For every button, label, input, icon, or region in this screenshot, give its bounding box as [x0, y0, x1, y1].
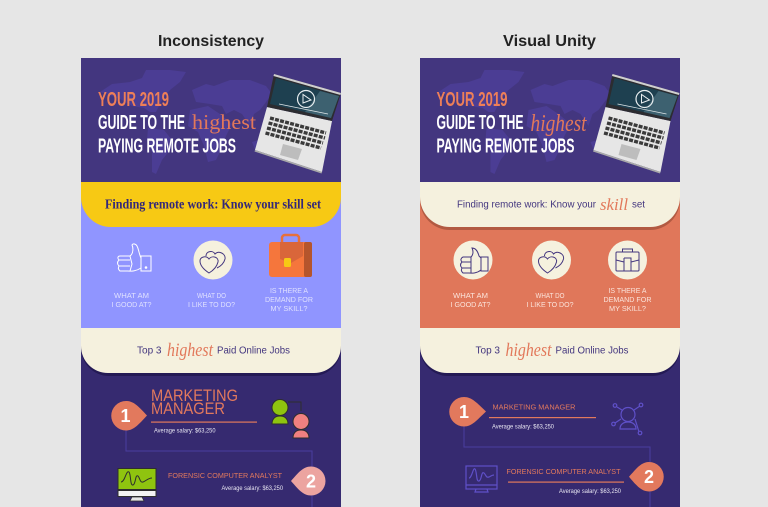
pin: number 1: 1	[459, 402, 469, 422]
header title: YOUR 2019	[436, 89, 508, 111]
job: forensic computer analyst: Average salary: $63,250	[222, 486, 284, 492]
pin: number 1	[449, 397, 486, 426]
job: forensic computer analyst	[168, 471, 284, 492]
cream banner: top 3: highest	[506, 340, 552, 361]
pin: number 2	[291, 466, 326, 496]
job: marketing manager: MARKETING MANAGER	[492, 403, 576, 412]
label: is there a demand: DEMAND FOR	[265, 295, 313, 304]
panel: inconsistency infographic	[81, 58, 341, 507]
label: is there a demand: DEMAND FOR	[604, 295, 652, 304]
job: marketing manager: Average salary: $63,250	[154, 428, 216, 434]
label: what am I good at: I GOOD AT?	[112, 300, 152, 309]
label: what do I like to do: WHAT DO	[536, 291, 565, 300]
heading: Visual Unity: Visual Unity	[503, 33, 596, 50]
cream banner: skill set: Finding remote work: Know your	[457, 198, 596, 210]
cream banner: top 3: Top 3	[137, 346, 162, 356]
header title: highest	[192, 110, 256, 134]
header title: PAYING REMOTE JOBS	[98, 136, 236, 158]
pin: number 1: 1	[120, 406, 131, 426]
world map	[100, 70, 272, 174]
skills section background	[81, 182, 341, 328]
pin: number 1	[111, 401, 147, 430]
cream banner: top 3	[420, 328, 680, 376]
yellow banner	[81, 182, 341, 227]
cream banner: skill set: set	[632, 198, 645, 210]
icon: outline person network	[612, 403, 643, 435]
yellow banner: Finding remote work: Know your skill set	[105, 198, 321, 212]
pin: number 2: 2	[306, 472, 316, 492]
world map	[438, 70, 610, 174]
pin: number 2: 2	[644, 467, 654, 487]
panel: visual unity infographic	[420, 58, 680, 507]
label: is there a demand: MY SKILL?	[270, 304, 308, 313]
job: marketing manager	[151, 387, 257, 434]
icon: hearts in circle	[194, 240, 232, 280]
skills section background	[420, 182, 680, 328]
label: what am I good at: WHAT AM	[453, 291, 488, 300]
label: is there a demand: IS THERE A	[270, 286, 309, 295]
header title	[436, 89, 588, 158]
icon: briefcase in circle	[608, 240, 647, 280]
pin: number 2	[629, 462, 664, 492]
label: what do I like to do: WHAT DO	[197, 291, 226, 300]
job: forensic computer analyst: FORENSIC COMPUTER ANALYST	[506, 467, 621, 476]
header title: GUIDE TO THE	[98, 112, 185, 134]
icon: hearts in circle	[532, 240, 571, 280]
label: what am I good at: I GOOD AT?	[450, 300, 490, 309]
icon: thumbs up	[118, 244, 151, 271]
job: forensic computer analyst	[506, 467, 624, 495]
header title: GUIDE TO THE	[436, 112, 524, 134]
header title: highest	[530, 111, 588, 137]
label: is there a demand: MY SKILL?	[609, 304, 646, 313]
icon: laptop	[593, 74, 680, 174]
icon: green monitor	[118, 468, 156, 501]
header title: YOUR 2019	[98, 89, 169, 111]
cream banner: top 3	[81, 328, 341, 376]
job: forensic computer analyst: Average salary: $63,250	[559, 489, 622, 495]
job: marketing manager: Average salary: $63,250	[492, 424, 555, 430]
header title: PAYING REMOTE JOBS	[436, 136, 574, 158]
cream banner: top 3: highest	[167, 340, 214, 361]
job: marketing manager: MANAGER	[151, 400, 225, 418]
label: is there a demand: IS THERE A	[608, 286, 647, 295]
cream banner: top 3: Paid Online Jobs	[556, 346, 628, 356]
heading: Inconsistency: Inconsistency	[158, 33, 264, 50]
header title	[98, 89, 256, 158]
icon: outline monitor	[466, 466, 497, 492]
icon: thumbs up in circle	[454, 240, 492, 280]
icon: people	[272, 400, 309, 438]
cream banner: top 3: Paid Online Jobs	[217, 346, 290, 356]
job: marketing manager	[489, 403, 596, 430]
cream banner: top 3: Top 3	[476, 346, 500, 356]
icon: laptop	[254, 74, 341, 174]
job: forensic computer analyst: FORENSIC COMPUTER ANALYST	[168, 471, 282, 480]
cream banner: skill set	[420, 182, 680, 230]
label: what do I like to do: I LIKE TO DO?	[526, 300, 574, 309]
job: marketing manager: MARKETING	[151, 387, 238, 405]
label: what am I good at: WHAT AM	[114, 291, 149, 300]
icon: orange briefcase	[269, 235, 312, 277]
cream banner: skill set: skill	[600, 195, 628, 214]
label: what do I like to do: I LIKE TO DO?	[188, 300, 235, 309]
connector line	[126, 430, 312, 507]
connector line	[464, 426, 650, 507]
header band	[420, 58, 680, 182]
header band	[81, 58, 341, 182]
